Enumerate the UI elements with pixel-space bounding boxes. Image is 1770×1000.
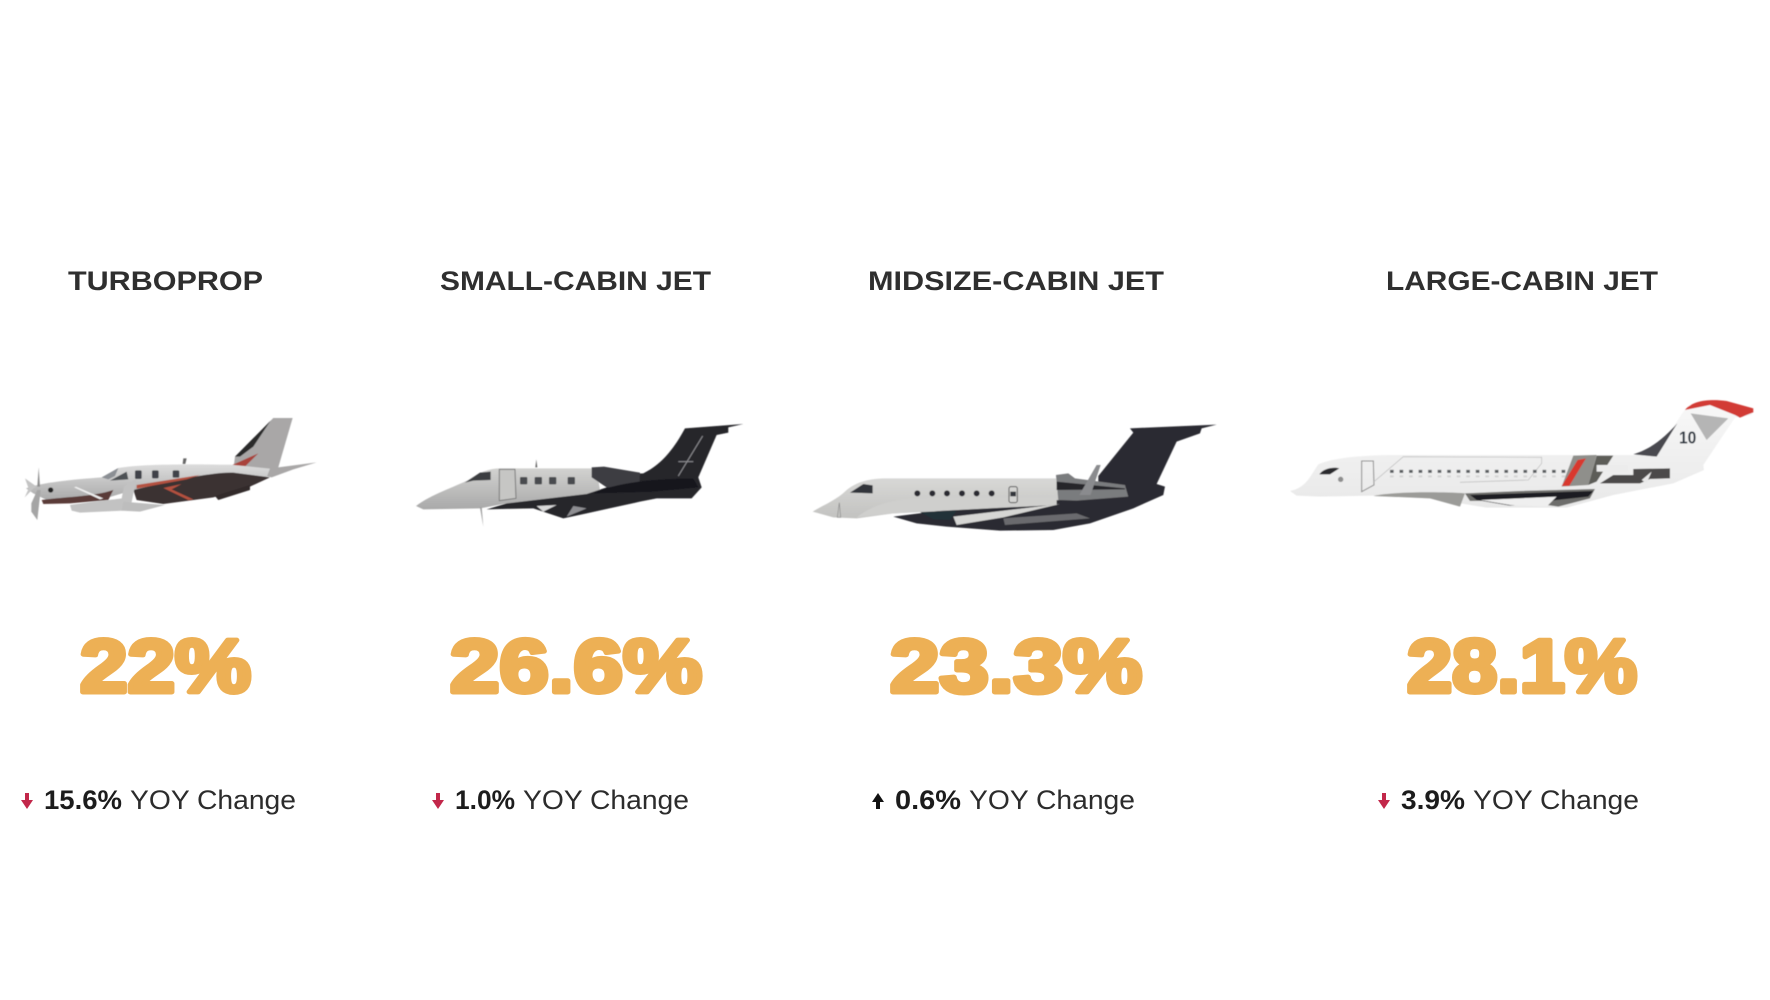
panel: turboprop — [21, 266, 317, 815]
yoy change: large-cabin jet: 3.9% — [1401, 785, 1465, 815]
panel: large-cabin jet — [1290, 266, 1753, 815]
yoy change: small-cabin jet — [432, 785, 689, 815]
share value: midsize-cabin jet: 23.3% — [890, 624, 1142, 708]
heading: large-cabin jet: LARGE-CABIN JET — [1386, 266, 1659, 296]
yoy change: turboprop: YOY Change — [130, 785, 296, 815]
icon: down arrow — [21, 793, 33, 809]
yoy change: turboprop: 15.6% — [44, 785, 122, 815]
panel: small-cabin jet — [416, 266, 743, 815]
yoy change: midsize-cabin jet — [872, 785, 1135, 815]
heading: small-cabin jet: SMALL-CABIN JET — [440, 266, 712, 296]
share value: large-cabin jet: 28.1% — [1407, 624, 1637, 708]
aircraft: large-cabin jet: 10 — [1679, 427, 1696, 447]
yoy change: midsize-cabin jet: YOY Change — [969, 785, 1135, 815]
aircraft: small-cabin jet — [416, 424, 743, 527]
panel: midsize-cabin jet — [813, 266, 1217, 815]
yoy change: large-cabin jet: YOY Change — [1473, 785, 1639, 815]
yoy change: small-cabin jet: 1.0% — [455, 785, 515, 815]
yoy change: midsize-cabin jet: 0.6% — [895, 785, 961, 815]
share value: small-cabin jet: 26.6% — [450, 624, 702, 708]
icon: down arrow — [432, 793, 444, 809]
icon: up arrow — [872, 793, 884, 809]
yoy change: large-cabin jet — [1378, 785, 1639, 815]
icon: down arrow — [1378, 793, 1390, 809]
yoy change: small-cabin jet: YOY Change — [523, 785, 689, 815]
yoy change: turboprop — [21, 785, 296, 815]
share value: turboprop: 22% — [80, 624, 251, 708]
aircraft: midsize-cabin jet — [813, 425, 1217, 531]
heading: midsize-cabin jet: MIDSIZE-CABIN JET — [868, 266, 1165, 296]
heading: turboprop: TURBOPROP — [68, 266, 263, 296]
aircraft: large-cabin jet — [1290, 400, 1753, 508]
aircraft: turboprop — [25, 418, 317, 520]
